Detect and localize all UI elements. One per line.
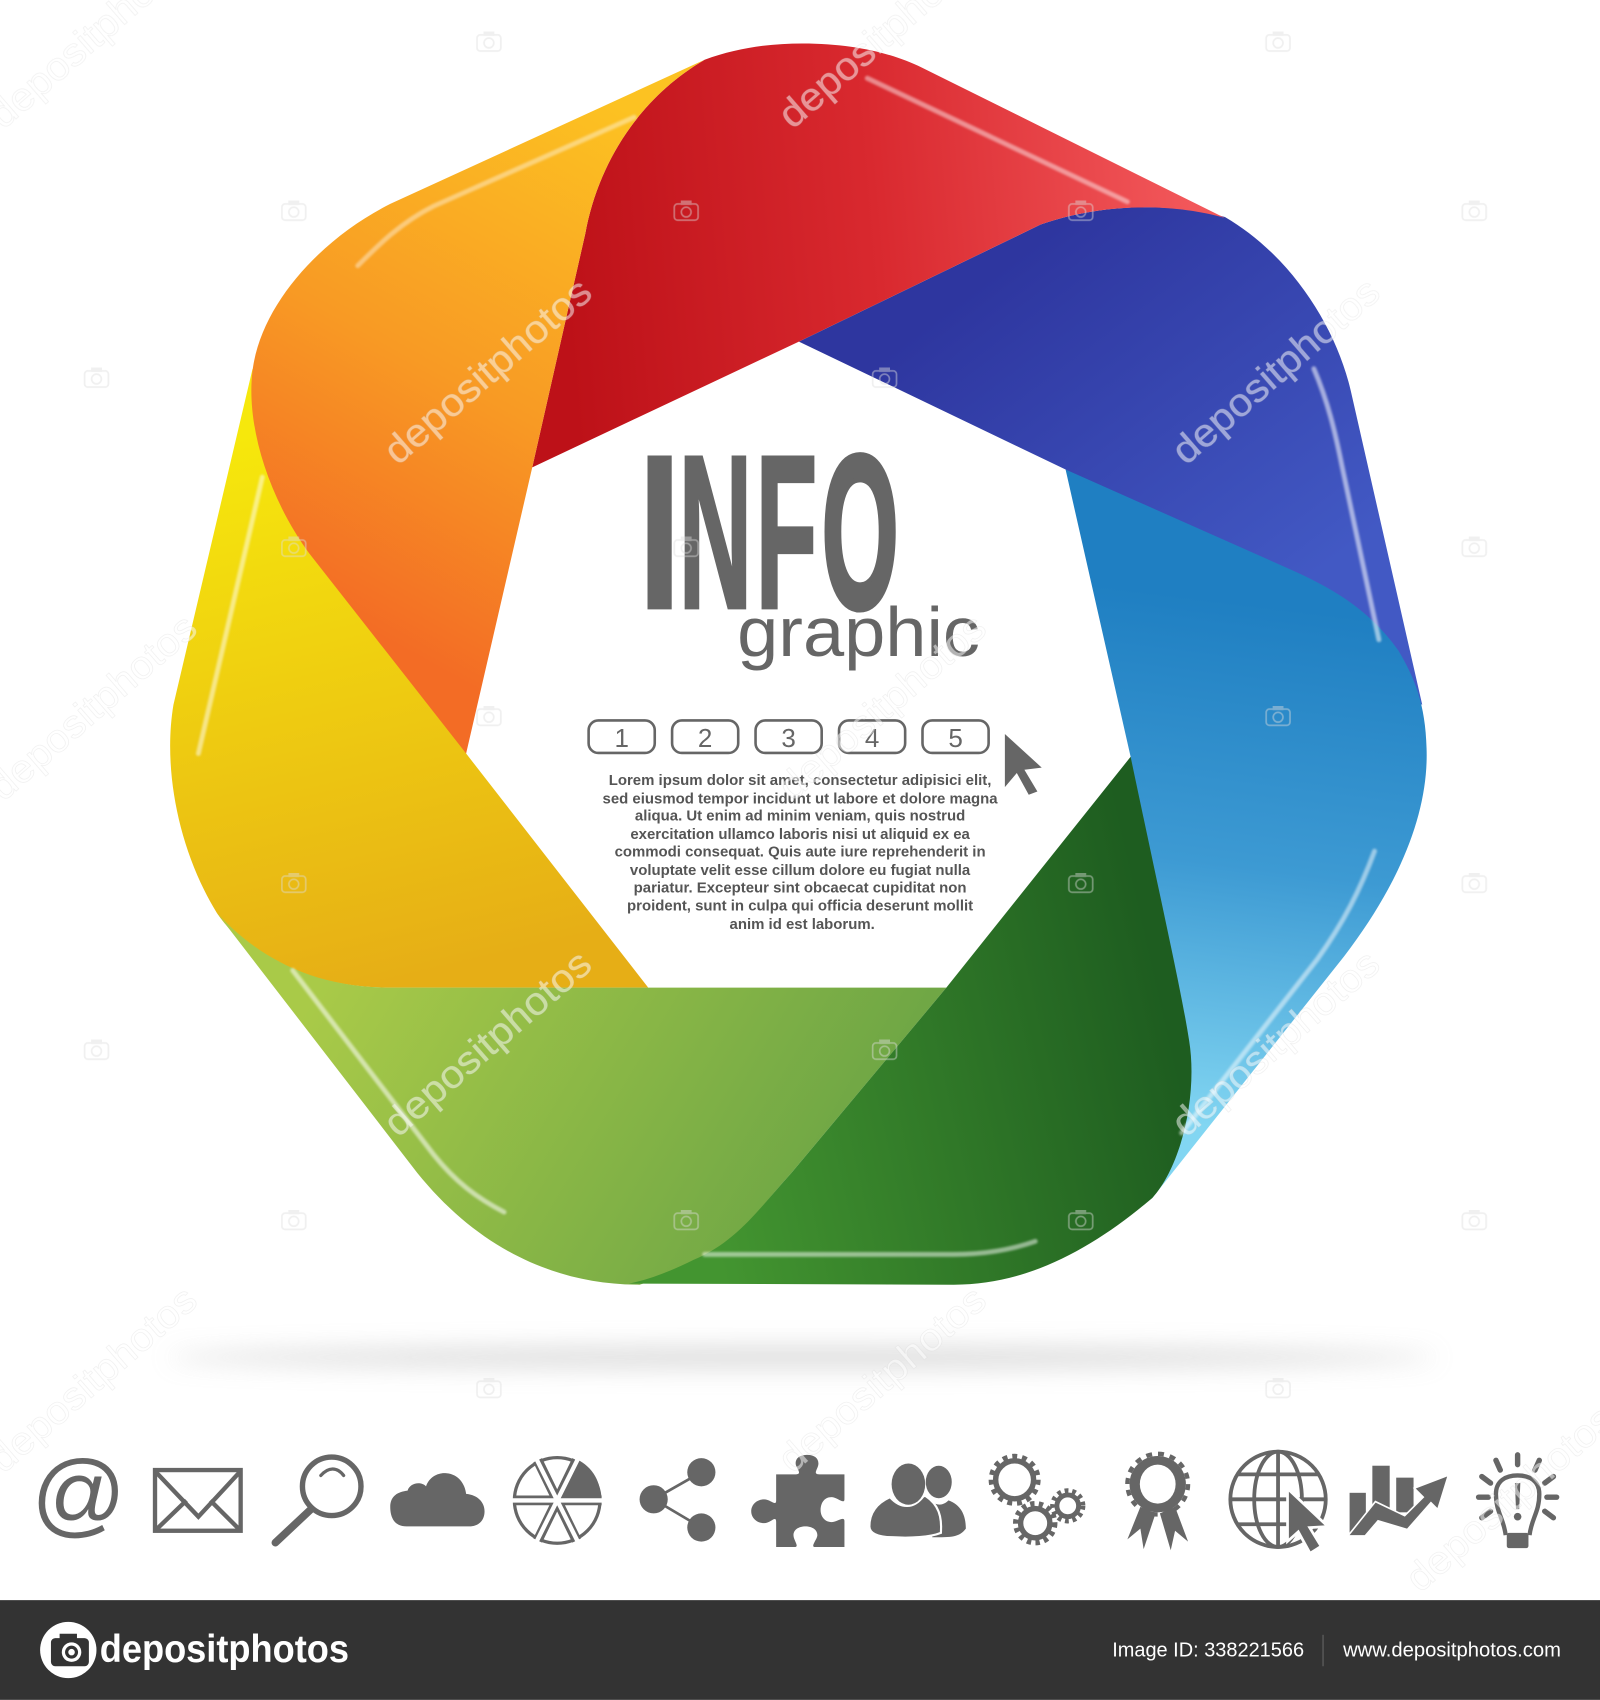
- logo icon: camera: [40, 1622, 96, 1678]
- image id: Image ID: 338221566: [1112, 1639, 1304, 1662]
- icon: award rosette: [1127, 1454, 1188, 1550]
- icon row: [31, 1441, 1557, 1551]
- heptagon ring of seven coloured blades: [170, 43, 1427, 1285]
- glossy highlights on blade edges: [198, 78, 1379, 1254]
- stock watermarks: depositphotos: [376, 270, 600, 473]
- stock watermarks: depositphotos: [770, 1278, 995, 1481]
- stock watermarks: depositphotos: [1164, 270, 1388, 473]
- blade: red: [532, 43, 1225, 467]
- blade: yellow: [170, 369, 648, 988]
- body text: voluptate velit esse cillum dolore eu fugiat nulla: [630, 862, 971, 879]
- stock watermarks: depositphotos: [770, 606, 995, 809]
- body text: exercitation ullamco laboris nisi ut aliquid ex ea: [630, 826, 971, 843]
- title: INFO: N: [679, 411, 752, 655]
- body text: sed eiusmod tempor incidunt ut labore et dolore magna: [603, 790, 998, 807]
- logo wordmark: depositphotos: [100, 1628, 349, 1671]
- button 2: [672, 720, 738, 753]
- button 2: 2: [698, 723, 712, 753]
- title: INFO: I: [638, 411, 681, 655]
- button 3: 3: [781, 723, 796, 753]
- icon: envelope: [155, 1470, 241, 1531]
- button 5: [922, 720, 989, 753]
- stock watermarks: depositphotos: [376, 942, 600, 1145]
- body text: Lorem ipsum dolor sit amet, consectetur adipisici elit,: [609, 772, 991, 789]
- watermark camera marks: [85, 32, 1486, 1397]
- title: INFO: [638, 411, 899, 655]
- stock watermarks: depositphotos: [1164, 942, 1388, 1145]
- icon: cloud: [390, 1473, 485, 1526]
- blade: orange: [251, 60, 705, 754]
- button 4: 4: [865, 723, 879, 753]
- ground shadow: [168, 1346, 1436, 1368]
- button 3: [756, 720, 822, 753]
- blade: sky blue: [1066, 470, 1427, 1198]
- body text: commodi consequat. Quis aute iure reprehenderit in: [615, 844, 986, 861]
- icon: globe with cursor: [1230, 1452, 1326, 1551]
- icon: cursor: [1005, 734, 1042, 795]
- body text: anim id est laborum.: [730, 916, 875, 933]
- footer logo: [40, 1622, 349, 1678]
- button 1: [589, 720, 655, 753]
- title: graphic: graphic: [737, 593, 980, 671]
- icon: magnifier: [275, 1457, 361, 1543]
- body text: proident, sunt in culpa qui officia deserunt mollit: [627, 898, 973, 915]
- icon: at sign: @: [31, 1441, 126, 1545]
- icon: gears: [991, 1457, 1083, 1543]
- title: INFO: F: [756, 411, 817, 655]
- text: O: [822, 411, 899, 655]
- icon: people: [869, 1464, 966, 1538]
- numbered buttons: [589, 720, 989, 753]
- button 1: 1: [614, 723, 629, 753]
- icon: puzzle piece: [751, 1455, 844, 1547]
- icon: pie chart: [512, 1457, 604, 1544]
- blade: blue: [799, 207, 1422, 705]
- blade: dark green: [629, 757, 1191, 1285]
- icon: growth chart: [1350, 1466, 1447, 1535]
- icon: light bulb: [1479, 1455, 1557, 1548]
- button 5: 5: [948, 723, 963, 753]
- button 4: [839, 720, 905, 753]
- icon: share: [640, 1458, 715, 1542]
- blade: light green: [217, 913, 946, 1285]
- body text: pariatur. Excepteur sint obcaecat cupiditat non: [634, 879, 967, 896]
- body text: aliqua. Ut enim ad minim veniam, quis nostrud: [635, 808, 965, 825]
- footer url: www.depositphotos.com: [1342, 1639, 1561, 1662]
- footer bar: [0, 1600, 1600, 1700]
